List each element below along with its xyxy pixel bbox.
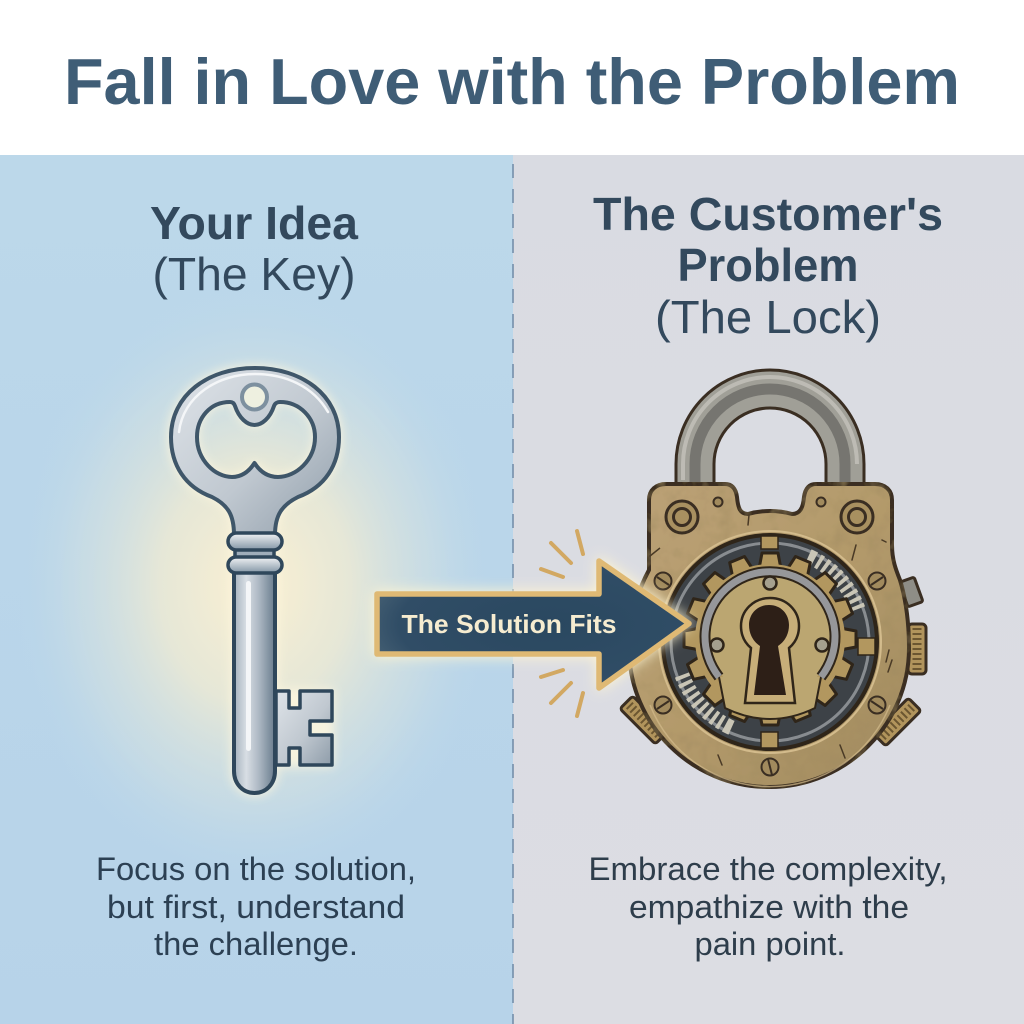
heading: your idea	[150, 197, 358, 300]
title: Fall in Love with the Problem	[64, 45, 960, 118]
caption: right	[588, 851, 948, 962]
shaft highlight	[246, 581, 251, 751]
heading: the customer's problem	[593, 188, 943, 343]
knob ribs	[629, 628, 917, 737]
heading: the customer's problem: Problem	[678, 239, 858, 291]
keyhole	[741, 598, 799, 703]
steel ring	[705, 572, 835, 677]
body cracks	[650, 515, 892, 765]
lock springs	[644, 516, 896, 768]
heading: the customer's problem: The Customer's	[593, 188, 943, 240]
key bit	[276, 691, 332, 765]
caption: right: pain point.	[694, 926, 846, 962]
caption: left	[96, 851, 416, 962]
lock blocks	[761, 536, 875, 748]
lock gear	[684, 553, 856, 725]
arrow label: The Solution Fits	[402, 609, 616, 639]
key collars	[228, 533, 282, 573]
caption: left: but first, understand	[107, 889, 405, 925]
heading: the customer's problem: (The Lock)	[655, 291, 881, 343]
arrow: the solution fits	[374, 555, 693, 693]
spark lines	[541, 531, 583, 716]
body ring lines	[650, 531, 890, 787]
heading: your idea: Your Idea	[150, 197, 358, 249]
bow highlight	[179, 374, 328, 432]
heading: your idea: (The Key)	[152, 248, 356, 300]
lock mechanism cavity	[663, 535, 877, 749]
caption: left: Focus on the solution,	[96, 851, 416, 887]
lock knobs	[620, 577, 926, 746]
icon: padlock	[620, 377, 926, 787]
lock shackle	[683, 377, 857, 492]
panel: the customer's problem	[513, 155, 1024, 1024]
caption: right: empathize with the	[629, 889, 909, 925]
arrow glow	[374, 555, 693, 693]
keyhole plate	[709, 577, 831, 719]
key shaft	[234, 570, 275, 793]
panel: your idea	[0, 155, 513, 1024]
lock screws	[654, 498, 886, 776]
arrow shape	[377, 561, 689, 688]
key glow	[170, 367, 340, 794]
panel divider	[512, 164, 514, 1024]
caption: left: the challenge.	[154, 926, 358, 962]
key bow	[171, 368, 339, 535]
caption: right: Embrace the complexity,	[588, 851, 948, 887]
ear bolts	[666, 501, 873, 533]
key ring hole	[242, 384, 267, 410]
icon: silver key	[170, 367, 340, 794]
lock body	[629, 484, 909, 787]
gear rivets	[710, 576, 828, 652]
